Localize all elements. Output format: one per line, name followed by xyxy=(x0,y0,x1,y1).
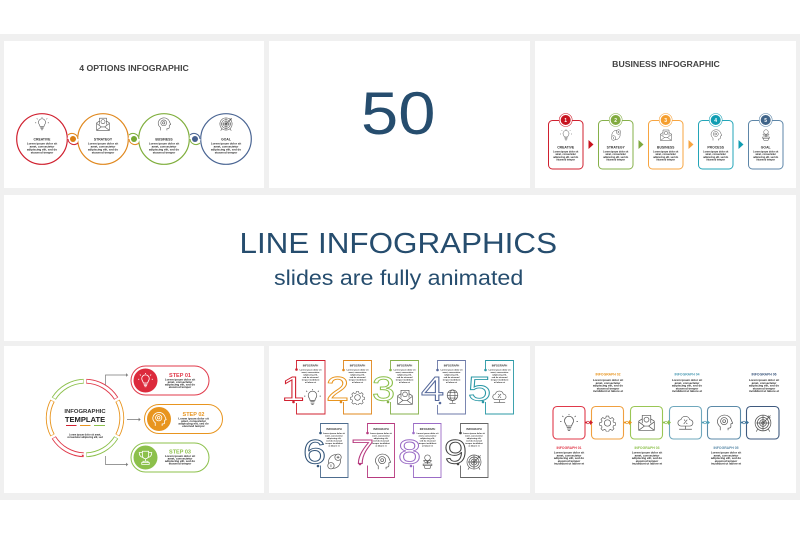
option circle: creative: eiusmod tempor xyxy=(31,150,54,154)
text block 03: incididunt ut labore et xyxy=(632,462,662,466)
number 8 box: adipiscing elit, xyxy=(420,437,435,440)
number 3 box: 3 xyxy=(372,371,395,409)
number 1 box: INFOGRAPH xyxy=(303,364,318,368)
number 50: 50 xyxy=(361,80,435,147)
card 2: strategy: STRATEGY xyxy=(607,146,626,150)
card 1: creative: adipiscing elit, sed do xyxy=(553,156,579,159)
number 1 box: tempor incididunt xyxy=(302,378,320,382)
card 3: business: 3 xyxy=(664,118,667,124)
option circle: goal: adipiscing elit, sed do xyxy=(211,148,241,152)
ring body text: Lorem ipsum dolor sit amet, xyxy=(69,434,101,436)
card 1: creative: 1 xyxy=(564,118,567,124)
step 03 pill: Lorem ipsum dolor sit xyxy=(165,454,195,458)
connector dot: orange xyxy=(68,133,78,145)
subtitle: slides are fully animated: slides are fully animated xyxy=(274,266,523,290)
text block 01: eiusmod tempor xyxy=(558,459,581,463)
text block 06: Lorem ipsum dolor sit xyxy=(749,378,779,382)
text block 06: adipiscing elit, sed do xyxy=(749,384,779,388)
card 4: process: amet, consectetur xyxy=(705,153,726,156)
text block 06: eiusmod tempor xyxy=(753,386,776,390)
text block 05 xyxy=(711,446,741,466)
text block 01: amet, consectetur xyxy=(557,453,582,457)
option circle: creative xyxy=(17,114,67,164)
segmented ring xyxy=(34,367,136,469)
number 6 box: ut labore et xyxy=(328,444,340,448)
text block 05: incididunt ut labore et xyxy=(711,462,741,466)
text block 03: INFOGRAPH 03 xyxy=(634,446,660,450)
step 01 pill xyxy=(131,366,209,395)
text block 03: amet, consectetur xyxy=(635,453,660,457)
number 2 box: 2 xyxy=(326,371,349,409)
step 02 pill: eiusmod tempor xyxy=(182,424,206,428)
number 5 box: tempor incididunt xyxy=(491,378,509,382)
number 4 box: ut labore et xyxy=(446,381,457,384)
card 5: goal: eiusmod tempor xyxy=(756,159,775,162)
card 4: process: PROCESS xyxy=(707,146,725,150)
option circle: business: amet, consectetur xyxy=(152,144,177,148)
arrow 2 xyxy=(638,140,644,149)
panel: six-step timeline xyxy=(535,346,796,493)
number 9 box: Lorem ipsum dolor sit xyxy=(463,432,485,435)
text block 03: adipiscing elit, sed do xyxy=(632,456,662,460)
text block 05: INFOGRAPH 05 xyxy=(713,446,739,450)
step 01 pill: amet, consectetur xyxy=(168,380,193,384)
number 7 box: Lorem ipsum dolor sit xyxy=(370,432,392,435)
option circle: business: Lorem ipsum dolor sit xyxy=(149,142,179,146)
number 9 box: adipiscing elit, xyxy=(467,437,482,440)
text block 03: eiusmod tempor xyxy=(636,459,659,463)
card 5: goal xyxy=(748,114,783,169)
text block 01: INFOGRAPH 01 xyxy=(556,446,582,450)
step 03 pill: eiusmod tempor xyxy=(169,462,192,466)
option circle: goal: GOAL xyxy=(221,138,231,142)
number 9 box: amet, consectetur xyxy=(465,434,483,438)
option circle: strategy: eiusmod tempor xyxy=(92,150,115,154)
number 6 box: INFOGRAPH xyxy=(326,427,342,431)
ring body text: consectetur adipiscing elit, sed xyxy=(67,436,103,439)
card 5: goal: 5 xyxy=(764,118,767,124)
option circle: strategy: Lorem ipsum dolor sit xyxy=(88,142,118,146)
option circle: strategy xyxy=(78,114,128,164)
panel: infographic template with steps xyxy=(4,346,264,493)
option circle: business: BUSINESS xyxy=(155,138,173,142)
connector 5 xyxy=(741,420,749,425)
arrow 1 xyxy=(588,140,594,149)
text block 04: adipiscing elit, sed do xyxy=(672,384,702,388)
card 3: business: BUSINESS xyxy=(657,146,675,150)
number 1 box: Lorem ipsum dolor sit xyxy=(300,368,322,372)
connector arrow: step 3 xyxy=(106,456,128,466)
option circle: business: eiusmod tempor xyxy=(153,150,176,154)
number 1 box: amet, consectetur xyxy=(302,371,320,374)
heading: business: BUSINESS INFOGRAPHIC xyxy=(612,59,721,69)
card 2: strategy: Lorem ipsum dolor sit xyxy=(603,150,628,154)
number 5 box: ut labore et xyxy=(494,381,505,384)
number 6 box xyxy=(303,424,348,478)
connector dot: green xyxy=(128,133,140,145)
timeline box 6 xyxy=(746,406,779,439)
text block 02: Lorem ipsum dolor sit xyxy=(593,378,623,382)
number 6 box: sed do eiusmod xyxy=(326,440,343,442)
number 4 box: adipiscing elit, xyxy=(444,374,459,376)
step 01 pill: STEP 01 xyxy=(169,373,191,379)
number 2 box: Lorem ipsum dolor sit xyxy=(347,368,369,372)
card 2: strategy: eiusmod tempor xyxy=(606,159,625,162)
ring dashes xyxy=(66,424,105,426)
text block 06 xyxy=(749,372,779,393)
step 03 pill: amet, consectetur xyxy=(168,456,193,460)
card 3: business xyxy=(648,114,683,169)
number 2 box: INFOGRAPH xyxy=(350,364,365,368)
text block 04 xyxy=(672,372,702,393)
number 5 box: 5 xyxy=(468,371,491,409)
card 5: goal: amet, consectetur xyxy=(755,153,776,156)
number 2 box xyxy=(326,360,372,414)
card 2: strategy: amet, consectetur xyxy=(605,153,626,156)
number 2 box: amet, consectetur xyxy=(349,371,367,374)
option circle: business xyxy=(139,114,189,164)
number 5 box: INFOGRAPH xyxy=(492,364,507,368)
step 02 pill: STEP 02 xyxy=(183,412,204,418)
number 3 box: amet, consectetur xyxy=(396,371,414,374)
text block 02: incididunt ut labore et xyxy=(593,389,623,393)
number 5 box: sed do eiusmod xyxy=(492,377,508,379)
number 8 box: Lorem ipsum dolor sit xyxy=(417,432,439,435)
panel: business infographic xyxy=(535,41,796,188)
card 2: strategy: adipiscing elit, sed do xyxy=(603,156,629,159)
step 01 pill: Lorem ipsum dolor sit xyxy=(165,378,195,382)
card 5: goal: adipiscing elit, sed do xyxy=(753,156,779,159)
panel: big number 50 xyxy=(269,41,530,188)
number 7 box: adipiscing elit, xyxy=(374,437,389,440)
number 5 box: Lorem ipsum dolor sit xyxy=(489,368,511,372)
text block 02: adipiscing elit, sed do xyxy=(593,384,623,388)
step 01 pill: eiusmod tempor xyxy=(169,385,192,389)
number 8 box: ut labore et xyxy=(422,444,433,448)
number 4 box: amet, consectetur xyxy=(443,371,461,374)
step 02 pill: amet, consectetur xyxy=(181,419,207,423)
card 4: process: 4 xyxy=(714,118,717,124)
card 4: process: Lorem ipsum dolor sit xyxy=(703,150,728,154)
option circle: strategy: STRATEGY xyxy=(94,138,113,142)
number 5 box: amet, consectetur xyxy=(491,371,509,374)
option circle: creative: amet, consectetur xyxy=(30,144,55,148)
text block 05: amet, consectetur xyxy=(714,453,739,457)
number 4 box: tempor incididunt xyxy=(443,378,461,382)
card 2: strategy xyxy=(598,114,633,169)
number 9 box xyxy=(444,424,488,478)
number 5 box: adipiscing elit, xyxy=(492,374,507,376)
step 01 pill: adipiscing elit, sed do xyxy=(165,382,195,386)
number 3 box: adipiscing elit, xyxy=(397,374,412,376)
number 9 box: 9 xyxy=(444,434,467,472)
number 9 box: ut labore et xyxy=(468,444,480,448)
text block 03 xyxy=(632,446,662,466)
card 1: creative: eiusmod tempor xyxy=(556,159,575,162)
number 4 box: sed do eiusmod xyxy=(444,377,460,379)
step 03 pill: adipiscing elit, sed do xyxy=(165,459,195,463)
number 8 box: INFOGRAPH xyxy=(420,427,435,431)
number 3 box xyxy=(372,360,418,414)
text block 01 xyxy=(554,446,584,466)
text block 01: Lorem ipsum dolor sit xyxy=(554,450,584,454)
card 4: process xyxy=(698,114,733,169)
timeline box 2 xyxy=(592,406,624,439)
timeline box 1 xyxy=(553,406,585,439)
text block 04: amet, consectetur xyxy=(675,381,700,385)
panel: 4 options infographic xyxy=(4,41,264,188)
number 7 box: ut labore et xyxy=(375,444,387,448)
card 1: creative: Lorem ipsum dolor sit xyxy=(553,150,578,154)
text block 01: adipiscing elit, sed do xyxy=(554,456,584,460)
text block 04: INFOGRAPH 04 xyxy=(674,372,700,376)
number 2 box: ut labore et xyxy=(352,381,363,384)
number 3 box: ut labore et xyxy=(399,381,410,384)
number 7 box: sed do eiusmod xyxy=(373,440,390,442)
number 2 box: tempor incididunt xyxy=(349,378,367,382)
option circle: creative: CREATIVE xyxy=(34,138,51,142)
number 7 box: tempor incididunt xyxy=(372,442,390,445)
number 6 box: tempor incididunt xyxy=(325,442,343,445)
text block 02: INFOGRAPH 02 xyxy=(595,372,621,376)
number 2 box: adipiscing elit, xyxy=(350,374,365,376)
number 4 box: Lorem ipsum dolor sit xyxy=(441,368,463,372)
number 7 box: INFOGRAPH xyxy=(373,427,389,431)
option circle: goal: Lorem ipsum dolor sit xyxy=(211,142,241,146)
text block 06: incididunt ut labore et xyxy=(749,389,779,393)
text block 06: INFOGRAPH 06 xyxy=(751,372,777,376)
text block 04: incididunt ut labore et xyxy=(672,389,702,393)
text block 03: Lorem ipsum dolor sit xyxy=(632,450,662,454)
card 5: goal: Lorem ipsum dolor sit xyxy=(753,150,778,154)
option circle: strategy: amet, consectetur xyxy=(91,144,116,148)
number 9 box: INFOGRAPH xyxy=(466,427,482,431)
number 4 box xyxy=(421,360,466,414)
text block 02: amet, consectetur xyxy=(596,381,621,385)
number 8 box: sed do eiusmod xyxy=(420,440,436,442)
step 03 pill: STEP 03 xyxy=(169,450,191,456)
card 2: strategy: 2 xyxy=(614,118,617,124)
card 4: process: eiusmod tempor xyxy=(706,159,725,162)
text block 04: Lorem ipsum dolor sit xyxy=(672,378,702,382)
arrow 4 xyxy=(738,140,744,149)
panel: main title xyxy=(4,195,796,341)
arrow 3 xyxy=(688,140,694,149)
card 3: business: Lorem ipsum dolor sit xyxy=(653,150,678,154)
text block 05: adipiscing elit, sed do xyxy=(711,456,741,460)
number 6 box: adipiscing elit, xyxy=(327,437,342,440)
number 6 box: Lorem ipsum dolor sit xyxy=(323,432,345,435)
connector arrow: step 2 xyxy=(127,418,140,420)
number 6 box: 6 xyxy=(303,434,326,472)
number 1 box: ut labore et xyxy=(305,381,316,384)
heading: 4 options: 4 OPTIONS INFOGRAPHIC xyxy=(79,63,190,73)
number 3 box: tempor incididunt xyxy=(396,378,414,382)
number 4 box: INFOGRAPH xyxy=(444,364,459,368)
timeline box 4 xyxy=(670,406,702,439)
step 02 pill xyxy=(144,404,222,434)
card 3: business: eiusmod tempor xyxy=(656,159,675,162)
card 1: creative xyxy=(548,114,583,169)
option circle: strategy: adipiscing elit, sed do xyxy=(88,148,118,152)
number 1 box xyxy=(282,360,325,414)
connector 3 xyxy=(663,420,671,425)
number 7 box: 7 xyxy=(351,434,374,472)
number 1 box: adipiscing elit, xyxy=(303,374,318,376)
number 8 box xyxy=(398,424,441,478)
text block 05: eiusmod tempor xyxy=(715,459,738,463)
timeline box 5 xyxy=(708,406,740,439)
number 7 box xyxy=(351,424,394,478)
step 02 pill: Lorem ipsum dolor sit xyxy=(178,416,209,420)
number 4 box: 4 xyxy=(421,371,444,409)
text block 02 xyxy=(593,372,623,393)
number 6 box: amet, consectetur xyxy=(325,434,343,438)
step 02 pill: adipiscing elit, sed do xyxy=(178,422,209,426)
number 8 box: 8 xyxy=(398,434,421,472)
title: line infographics: LINE INFOGRAPHICS xyxy=(240,228,557,260)
connector dot: blue xyxy=(190,133,200,145)
number 9 box: sed do eiusmod xyxy=(466,440,483,442)
connector 1 xyxy=(585,420,593,425)
option circle: goal: eiusmod tempor xyxy=(215,150,238,154)
option circle: goal xyxy=(201,114,251,164)
number 3 box: Lorem ipsum dolor sit xyxy=(394,368,416,372)
option circle: goal: amet, consectetur xyxy=(214,144,239,148)
connector arrow: step 1 xyxy=(106,374,128,385)
option circle: business: adipiscing elit, sed do xyxy=(149,148,179,152)
number 3 box: sed do eiusmod xyxy=(397,377,413,379)
connector 2 xyxy=(624,420,632,425)
timeline box 3 xyxy=(630,406,662,439)
number 5 box xyxy=(468,360,514,414)
number 8 box: amet, consectetur xyxy=(419,434,437,438)
step 03 pill xyxy=(131,443,209,472)
number 2 box: sed do eiusmod xyxy=(350,377,366,379)
text block 06: amet, consectetur xyxy=(752,381,777,385)
text block 01: incididunt ut labore et xyxy=(554,462,584,466)
card 3: business: adipiscing elit, sed do xyxy=(653,156,679,159)
number 7 box: amet, consectetur xyxy=(372,434,390,438)
ring heading: INFOGRAPHIC xyxy=(64,409,106,415)
card 5: goal: GOAL xyxy=(761,146,771,150)
number 8 box: tempor incididunt xyxy=(419,442,437,445)
option circle: creative: Lorem ipsum dolor sit xyxy=(27,142,57,146)
ring heading second line: TEMPLATE xyxy=(65,415,105,424)
number 1 box: 1 xyxy=(282,371,305,409)
number 3 box: INFOGRAPH xyxy=(397,364,412,368)
text block 05: Lorem ipsum dolor sit xyxy=(711,450,741,454)
card 3: business: amet, consectetur xyxy=(655,153,676,156)
text block 02: eiusmod tempor xyxy=(597,386,620,390)
card 1: creative: CREATIVE xyxy=(557,146,575,150)
number 9 box: tempor incididunt xyxy=(465,442,483,445)
card 4: process: adipiscing elit, sed do xyxy=(703,156,729,159)
text block 04: eiusmod tempor xyxy=(676,386,699,390)
number 1 box: sed do eiusmod xyxy=(303,377,319,379)
card 1: creative: amet, consectetur xyxy=(555,153,576,156)
connector 4 xyxy=(702,420,710,425)
option circle: creative: adipiscing elit, sed do xyxy=(27,148,57,152)
panel: numbered boxes xyxy=(269,346,530,493)
